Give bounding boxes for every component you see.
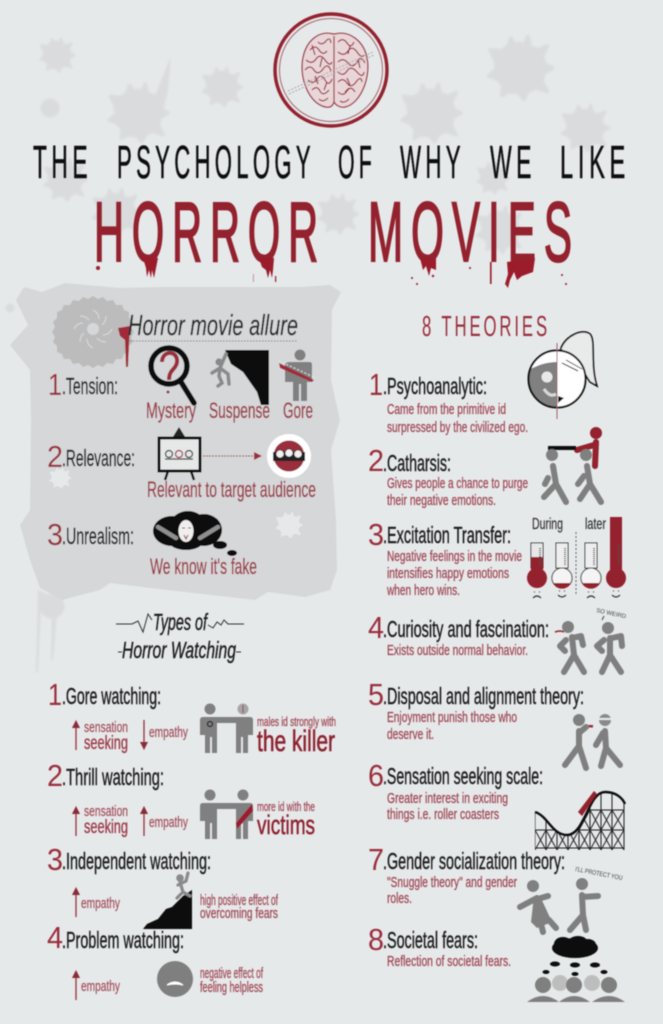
icon: split face bbox=[528, 332, 597, 419]
label: we know it's fake: We know it's fake bbox=[150, 554, 257, 579]
callout: overcoming fears bbox=[200, 892, 278, 922]
icon: curious figures: SO WEIRD bbox=[596, 608, 627, 620]
theory 3: excitation transfer: 3 bbox=[368, 517, 384, 552]
arrow: empathy up: empathy bbox=[81, 895, 120, 912]
item: unrealism: .Unrealism: bbox=[62, 523, 134, 549]
theory 2: catharsis: their negative emotions. bbox=[387, 492, 496, 509]
theory 7: gender socialization theory: "Snuggle theory" and gender bbox=[387, 874, 517, 891]
arrows and text: gore watching: empathy bbox=[149, 724, 188, 741]
icon: roller coaster bbox=[535, 791, 625, 850]
title: horror movies: HORROR bbox=[94, 185, 326, 279]
arrow bbox=[203, 452, 262, 460]
icon: thermometers bbox=[527, 516, 626, 598]
callout: victims: victims bbox=[257, 810, 315, 840]
arrows and text: thrill watching bbox=[72, 803, 188, 838]
theory 5: disposal and alignment theory: deserve it. bbox=[387, 726, 434, 743]
theory 6: sensation seeking scale: Greater interest in exciting bbox=[387, 790, 508, 807]
theory 7: gender socialization theory bbox=[368, 842, 565, 907]
icon: saw blade bbox=[52, 296, 134, 368]
thermometer: later, cool bbox=[581, 543, 601, 589]
theory 3: excitation transfer: Negative feelings in the movie bbox=[387, 548, 522, 565]
theory 7: gender socialization theory: 7 bbox=[368, 842, 384, 877]
theory 1: psychoanalytic: 1 bbox=[369, 367, 383, 402]
callout: the killer: the killer bbox=[257, 725, 335, 758]
arrows and text: thrill watching: seeking bbox=[84, 817, 128, 838]
icon: magnifier mystery bbox=[151, 348, 194, 403]
icon: punishing figures bbox=[565, 714, 620, 768]
theory 4: curiosity and fascination: 4 bbox=[368, 610, 384, 645]
panel highlights bbox=[50, 468, 302, 537]
heading: types of horror watching: Horror Watching bbox=[122, 637, 236, 663]
theory 4: curiosity and fascination: Exists outside normal behavior. bbox=[387, 642, 528, 659]
theory 2: catharsis bbox=[368, 443, 528, 509]
theory 1: psychoanalytic: .Psychoanalytic: bbox=[383, 373, 487, 399]
icon: woman and protector bbox=[520, 866, 623, 932]
title line: PSYCHOLOGY bbox=[117, 136, 315, 188]
callout: the killer bbox=[257, 714, 336, 758]
item: problem watching bbox=[47, 920, 184, 955]
callout: feeling helpless: feeling helpless bbox=[200, 979, 263, 996]
thermometer: later, hot bbox=[606, 517, 626, 588]
item: relevance: .Relevance: bbox=[62, 445, 135, 471]
arrows and text: gore watching: seeking bbox=[84, 733, 128, 754]
theory 2: catharsis: .Catharsis: bbox=[383, 450, 451, 476]
item: thrill watching: 2 bbox=[47, 758, 63, 793]
item: tension: 1 bbox=[48, 367, 62, 402]
item: gore watching: .Gore watching: bbox=[62, 683, 161, 709]
callout: feeling helpless: negative effect of bbox=[200, 965, 263, 982]
arrows and text: thrill watching: empathy bbox=[149, 814, 188, 831]
theory 3: excitation transfer: .Excitation Transfer: bbox=[383, 522, 511, 548]
heading: types of horror watching bbox=[116, 609, 244, 663]
icon: two men, victim bbox=[200, 790, 253, 839]
icon: thermometers: later bbox=[585, 516, 606, 533]
title line: OF bbox=[338, 136, 376, 188]
theory 6: sensation seeking scale: 6 bbox=[368, 758, 384, 793]
item: thrill watching: .Thrill watching: bbox=[62, 764, 164, 790]
theory 1: psychoanalytic: Came from the primitive id bbox=[387, 401, 506, 418]
icon: curious figures bbox=[555, 608, 627, 672]
theory 6: sensation seeking scale: .Sensation seeking scale: bbox=[383, 763, 543, 789]
title line: THE bbox=[33, 136, 92, 188]
arrows and text: gore watching: sensation bbox=[84, 719, 128, 736]
icon: audience circle bbox=[267, 434, 311, 478]
arrows and text: gore watching bbox=[72, 719, 188, 754]
arrow: empathy up: empathy bbox=[81, 978, 120, 995]
theory 5: disposal and alignment theory: 5 bbox=[368, 677, 384, 712]
theory 3: excitation transfer: intensifies happy emotions bbox=[387, 565, 509, 582]
theory 6: sensation seeking scale bbox=[368, 758, 543, 823]
item: problem watching: .Problem watching: bbox=[62, 927, 184, 953]
label: relevant to target audience: Relevant to target audience bbox=[147, 477, 316, 502]
emblem: crossed-out brain bbox=[275, 14, 387, 126]
theory 3: excitation transfer: when hero wins. bbox=[386, 582, 460, 599]
item: unrealism: 3 bbox=[47, 517, 63, 552]
theory 2: catharsis: 2 bbox=[368, 443, 384, 478]
thermometer: during, cool bbox=[552, 543, 572, 589]
theory 8: societal fears: .Societal fears: bbox=[383, 927, 478, 953]
background splatters bbox=[6, 37, 609, 672]
icon: catharsis figures bbox=[544, 427, 602, 502]
labels: tension: Gore bbox=[283, 398, 313, 423]
callout: overcoming fears: high positive effect of bbox=[200, 892, 278, 909]
item: tension bbox=[48, 367, 118, 402]
heading: horror movie allure: Horror movie allure bbox=[128, 310, 298, 342]
theory 8: societal fears: 8 bbox=[368, 922, 384, 957]
item: independent watching bbox=[47, 842, 211, 877]
item: gore watching bbox=[48, 677, 161, 712]
icon: two men, killer bbox=[200, 704, 253, 753]
icon: sad face bbox=[157, 961, 193, 997]
theory 3: excitation transfer bbox=[368, 517, 522, 599]
theory 8: societal fears: Reflection of societal fears. bbox=[387, 953, 511, 970]
item: problem watching: 4 bbox=[47, 920, 63, 955]
labels: tension bbox=[146, 398, 313, 423]
theory 5: disposal and alignment theory bbox=[368, 677, 584, 743]
theory 4: curiosity and fascination bbox=[368, 610, 549, 659]
arrow: empathy up bbox=[72, 970, 120, 1000]
item: thrill watching bbox=[47, 758, 164, 793]
theory 2: catharsis: Gives people a chance to purge bbox=[387, 475, 528, 492]
item: independent watching: 3 bbox=[47, 842, 63, 877]
item: relevance: 2 bbox=[47, 439, 63, 474]
theory 1: psychoanalytic bbox=[369, 367, 528, 436]
title line: WE bbox=[490, 136, 536, 188]
labels: tension: Suspense bbox=[209, 398, 270, 423]
labels: tension: Mystery bbox=[146, 398, 196, 423]
icon: thought cloud bbox=[153, 511, 237, 556]
arrows and text: thrill watching: sensation bbox=[84, 803, 128, 820]
theory 7: gender socialization theory: roles. bbox=[387, 890, 412, 907]
brain bbox=[302, 33, 368, 107]
theory 1: psychoanalytic: surpressed by the civilized ego. bbox=[387, 419, 528, 436]
icon: billboard bbox=[159, 428, 200, 480]
theory 4: curiosity and fascination: .Curiosity and fascination: bbox=[383, 616, 549, 642]
heading: types of horror watching: Types of bbox=[153, 609, 209, 635]
icon: woman and protector: I'LL PROTECT YOU bbox=[575, 866, 623, 882]
blood drips bbox=[96, 258, 567, 288]
theory 8: societal fears bbox=[368, 922, 511, 970]
theory 5: disposal and alignment theory: Enjoyment punish those who bbox=[387, 709, 517, 726]
callout: feeling helpless bbox=[200, 965, 263, 996]
item: relevance bbox=[47, 439, 135, 474]
icon: suspense cliff bbox=[212, 350, 269, 405]
title line: WHY bbox=[400, 136, 465, 188]
callout: the killer: males id strongly with bbox=[257, 714, 336, 729]
theory 6: sensation seeking scale: things i.e. roller coasters bbox=[387, 806, 499, 823]
blood on saw bbox=[118, 326, 130, 367]
arrow: empathy up bbox=[72, 887, 120, 917]
callout: victims bbox=[257, 799, 315, 840]
icon: climber on hill bbox=[143, 873, 192, 929]
callout: victims: more id with the bbox=[257, 799, 315, 814]
item: tension: .Tension: bbox=[62, 373, 118, 399]
item: unrealism bbox=[47, 517, 134, 552]
icon: crowd under cloud bbox=[527, 936, 625, 1002]
icon: thermometers: During bbox=[532, 516, 563, 533]
thermometer: during, hot bbox=[527, 543, 547, 588]
icon: gore man bbox=[279, 350, 316, 401]
title line bbox=[33, 136, 630, 188]
item: independent watching: .Independent watching: bbox=[62, 848, 211, 874]
panel: horror movie allure backdrop bbox=[10, 283, 341, 600]
heading: 8 theories: 8 THEORIES bbox=[422, 311, 550, 343]
item: gore watching: 1 bbox=[48, 677, 62, 712]
callout: overcoming fears: overcoming fears bbox=[200, 905, 278, 922]
